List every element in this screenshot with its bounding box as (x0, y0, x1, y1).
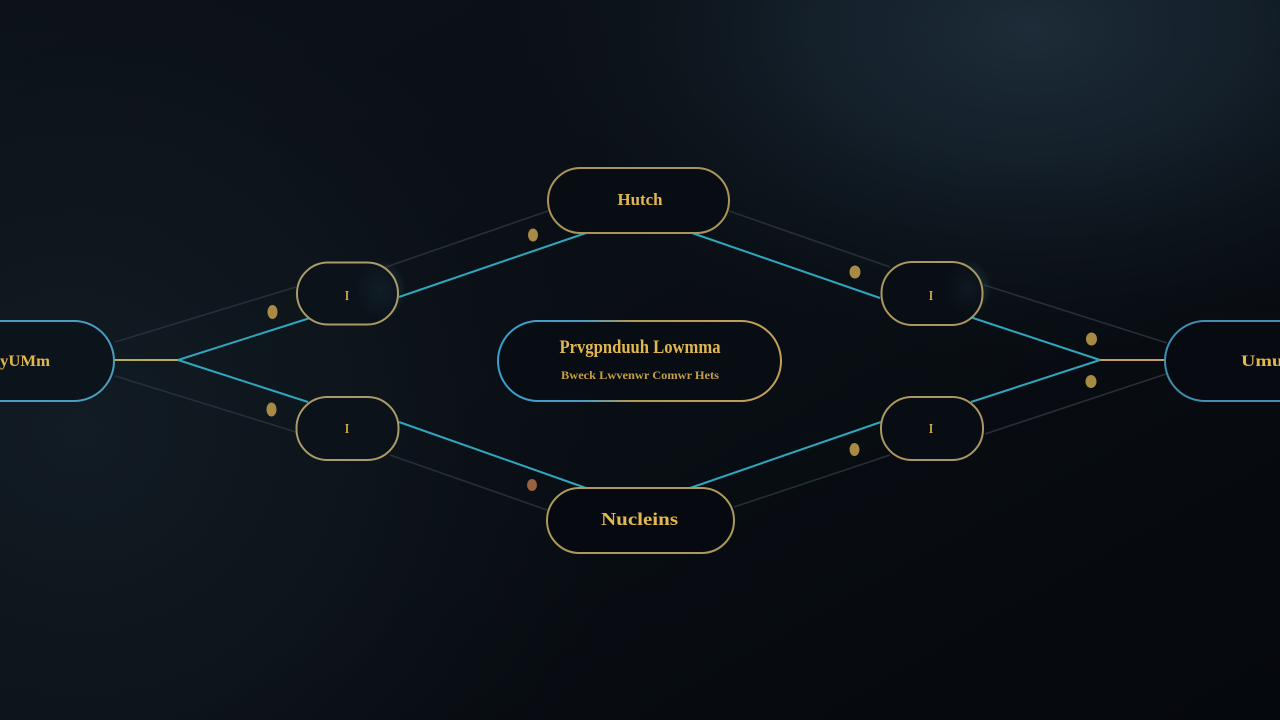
node: upper left (297, 260, 406, 324)
gold connector: right trunk (1100, 359, 1165, 361)
node: lower right: I (929, 422, 933, 437)
node: center summary: Prvgpnduuh Lowmma (560, 337, 721, 358)
gold dots (266, 228, 1097, 491)
node: top (548, 168, 729, 233)
node: bottom (547, 488, 734, 553)
node: center summary (498, 321, 781, 401)
node: left end: yUMm (0, 353, 51, 370)
node: center summary: Bweck Lwvenwr Comwr Hets (561, 368, 719, 382)
faint connector lines (115, 211, 1167, 510)
node: bottom: Nucleins (601, 509, 678, 529)
node: lower left (296, 397, 398, 460)
gold connector: left trunk (114, 359, 178, 361)
node: lower right (881, 397, 983, 460)
node: upper right (882, 260, 992, 325)
node: top: Hutch (618, 190, 663, 209)
node: upper right: I (929, 289, 933, 304)
node: right end (1165, 321, 1280, 401)
cyan connector lines (178, 233, 1100, 488)
node: left end (0, 321, 114, 401)
node: lower left: I (345, 422, 349, 437)
node: right end: Umu (1241, 353, 1280, 370)
node: upper left: I (345, 289, 349, 304)
